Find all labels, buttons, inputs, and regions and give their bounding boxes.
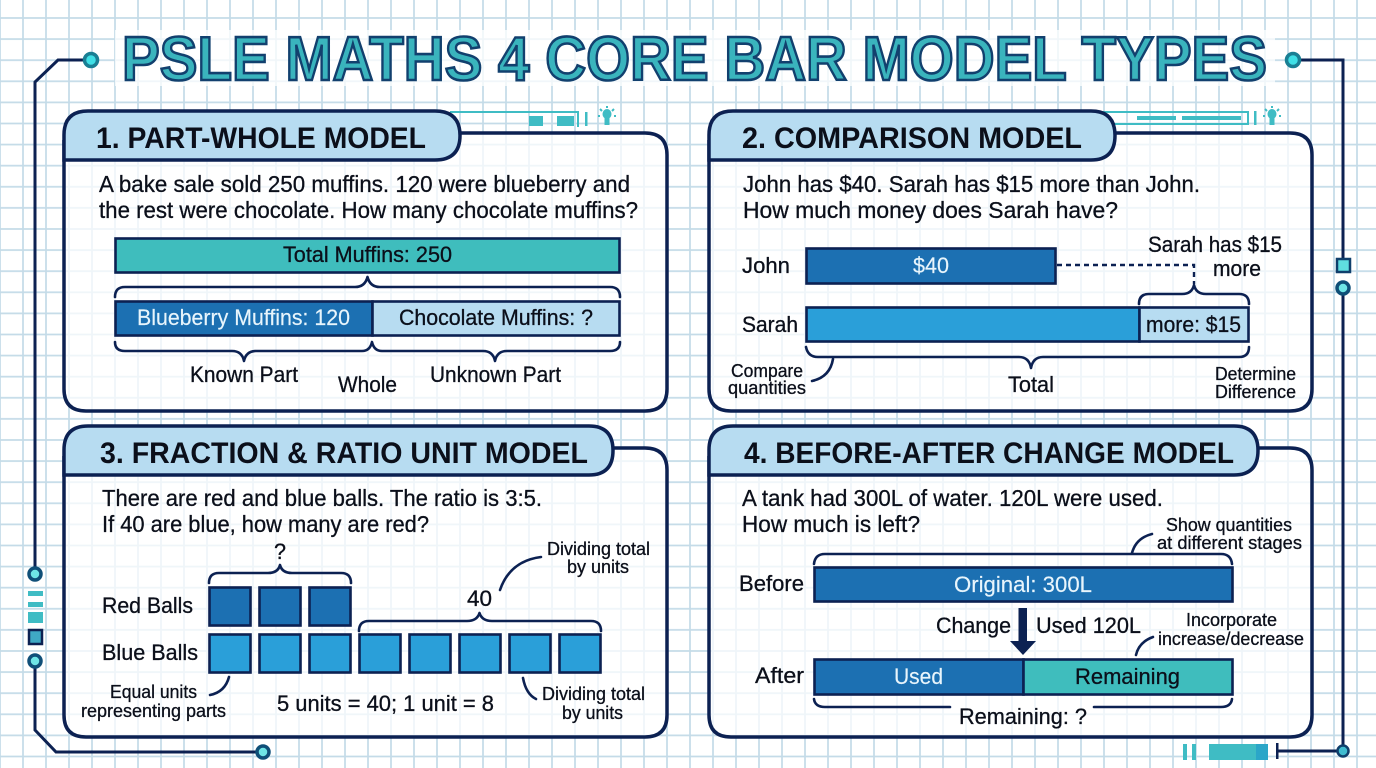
circuit: right wire and widgets: [1183, 54, 1350, 760]
callout: dividing total bottom: Dividing total: [542, 684, 645, 704]
parts bar: [116, 302, 620, 336]
sarah row: Sarah: [742, 312, 798, 337]
part labels: Unknown Part: [430, 362, 561, 387]
red unknown label: ?: [274, 539, 286, 564]
question 3: If 40 are blue, how many are red?: [102, 511, 429, 537]
after row: [755, 660, 1232, 694]
parts bar: Chocolate Muffins: ?: [399, 305, 593, 330]
callout: show quantities: [1132, 515, 1302, 553]
equation: 5 units = 40; 1 unit = 8: [277, 691, 494, 716]
total bar: Total Muffins: 250: [283, 242, 452, 267]
question 3: There are red and blue balls. The ratio is 3:5.: [102, 485, 542, 511]
before row: [739, 568, 1232, 602]
difference label: [1148, 232, 1282, 281]
callout: compare quantities: [728, 359, 833, 398]
heading 4: [709, 426, 1258, 475]
change arrow: [1010, 608, 1036, 655]
question 4: [742, 485, 1163, 537]
panel 2: comparison model: [709, 111, 1312, 411]
heading 2: [709, 111, 1115, 160]
callout: show quantities: Show quantities: [1166, 515, 1292, 535]
callout: equal units: representing parts: [81, 701, 226, 721]
before row: Before: [739, 571, 804, 596]
heading 3: 3. FRACTION & RATIO UNIT MODEL: [100, 437, 588, 470]
callout: incorporate increase/decrease: [1136, 610, 1304, 655]
question 2: How much money does Sarah have?: [743, 197, 1118, 223]
circuit: left lower wire and widgets: [28, 568, 269, 758]
total brace: [806, 347, 1249, 368]
difference label: Sarah has $15: [1148, 232, 1282, 257]
after row: Remaining: [1075, 664, 1180, 689]
after row: Used: [894, 664, 943, 689]
callout: determine difference: Difference: [1215, 382, 1296, 402]
forty label: 40: [467, 586, 492, 611]
after row: After: [755, 663, 804, 688]
callout: dividing total bottom: by units: [562, 703, 623, 723]
change labels: Change: [936, 613, 1011, 638]
panel 1: part-whole model: [64, 111, 667, 411]
part labels: Known Part: [190, 362, 298, 387]
callout: equal units: [81, 677, 229, 721]
john row: John: [742, 253, 790, 278]
change labels: Used 120L: [1036, 613, 1141, 638]
decoration: panel 2 strip and bulb: [1100, 106, 1281, 125]
heading 1: 1. PART-WHOLE MODEL: [96, 122, 426, 155]
circuit: left upper wire: [35, 54, 98, 574]
whole brace: [115, 277, 620, 297]
callout: compare quantities: quantities: [728, 378, 806, 398]
john row: $40: [913, 253, 949, 278]
remaining brace: [814, 699, 1232, 707]
callout: incorporate increase/decrease: increase/decrease: [1158, 629, 1304, 649]
callout: compare quantities: Compare: [731, 361, 803, 381]
red balls row: [102, 588, 350, 626]
panel 3: fraction and ratio unit model: [64, 426, 667, 737]
total label: Total: [1008, 372, 1054, 397]
callout: determine difference: [1215, 364, 1296, 402]
callout: dividing total top: [500, 539, 650, 590]
sarah row: more: $15: [1146, 312, 1241, 337]
decoration: panel 1 strip and bulb: [450, 106, 616, 127]
question 2: John has $40. Sarah has $15 more than John.: [743, 171, 1200, 197]
callout: incorporate increase/decrease: Incorporate: [1186, 610, 1277, 630]
before row: Original: 300L: [954, 572, 1092, 597]
callout: show quantities: at different stages: [1157, 533, 1302, 553]
remaining label: Remaining: ?: [959, 704, 1087, 729]
sarah row: [742, 308, 1248, 342]
question 1: A bake sale sold 250 muffins. 120 were blueberry and: [99, 171, 630, 197]
john row: [742, 248, 1056, 284]
total bar: [116, 238, 620, 272]
question 1: [99, 171, 638, 223]
callout: determine difference: Determine: [1215, 364, 1296, 384]
heading 4: 4. BEFORE-AFTER CHANGE MODEL: [744, 437, 1234, 470]
callout: dividing total top: Dividing total: [547, 539, 650, 559]
blue balls row: Blue Balls: [102, 640, 198, 665]
question 3: [102, 485, 542, 537]
heading 2: 2. COMPARISON MODEL: [742, 122, 1082, 155]
difference brace: [1139, 285, 1249, 304]
question 4: A tank had 300L of water. 120L were used.: [742, 485, 1163, 511]
forty brace: [359, 613, 601, 631]
part braces: [115, 342, 620, 361]
red brace: [209, 565, 351, 583]
callout: equal units: Equal units: [110, 682, 197, 702]
change labels: [936, 613, 1141, 638]
callout: dividing total top: by units: [567, 557, 629, 577]
parts bar: Blueberry Muffins: 120: [137, 305, 350, 330]
callout: dividing total bottom: [523, 678, 645, 723]
part labels: [190, 362, 561, 397]
blue balls row: [102, 634, 600, 672]
part labels: Whole: [338, 372, 397, 397]
dashed connector: [1057, 265, 1194, 284]
question 1: the rest were chocolate. How many chocolate muffins?: [99, 197, 638, 223]
question 4: How much is left?: [742, 511, 920, 537]
heading 3: [64, 426, 613, 475]
before brace: [814, 554, 1232, 564]
difference label: more: [1213, 256, 1261, 281]
question 2: [743, 171, 1200, 223]
red balls row: Red Balls: [102, 593, 193, 618]
panel 4: before-after change model: [709, 426, 1312, 737]
title: PSLE MATHS 4 CORE BAR MODEL TYPES: [122, 25, 1267, 94]
heading 1: [64, 111, 460, 160]
